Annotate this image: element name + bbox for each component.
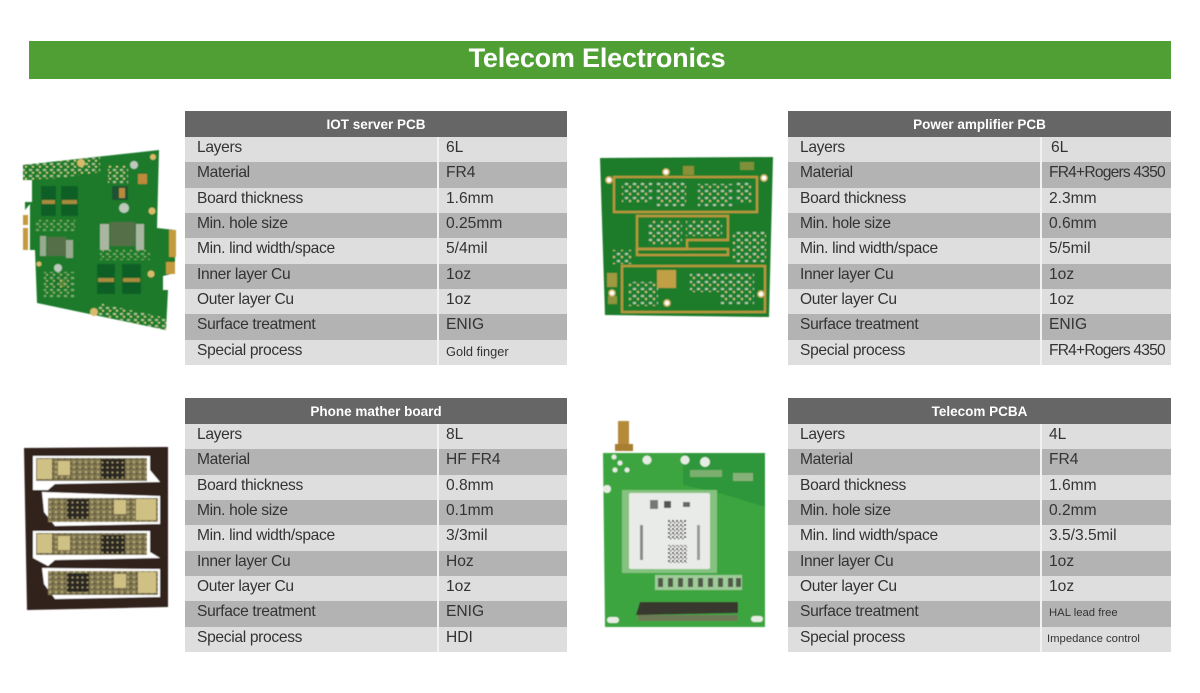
table: Power amplifier PCB: Min. hole size bbox=[800, 215, 891, 232]
table: Phone mather board: 0.1mm bbox=[446, 502, 494, 519]
table: Telecom PCBA: Layers bbox=[800, 426, 845, 443]
table: Power amplifier PCB: 5/5mil bbox=[1049, 240, 1091, 257]
table: Power amplifier PCB: Material bbox=[800, 164, 853, 181]
table: Telecom PCBA: Surface treatment bbox=[800, 603, 918, 620]
table: IOT server PCB: 1oz bbox=[446, 291, 471, 308]
table heading: IOT server PCB bbox=[326, 117, 426, 132]
table: Phone mather board: Board thickness bbox=[197, 477, 303, 494]
table: Phone mather board: Outer layer Cu bbox=[197, 578, 294, 595]
table: Telecom PCBA: Outer layer Cu bbox=[800, 578, 897, 595]
table: IOT server PCB: Gold finger bbox=[446, 344, 509, 359]
table: IOT server PCB: Surface treatment bbox=[197, 316, 315, 333]
table: Telecom PCBA: FR4 bbox=[1049, 451, 1078, 468]
table: IOT server PCB: Min. hole size bbox=[197, 215, 288, 232]
table: IOT server PCB: 1oz bbox=[446, 266, 471, 283]
table heading: Power amplifier PCB bbox=[913, 117, 1046, 132]
table: Telecom PCBA: Board thickness bbox=[800, 477, 906, 494]
table heading bbox=[788, 111, 1171, 137]
table: Telecom PCBA: 1oz bbox=[1049, 578, 1074, 595]
title banner bbox=[29, 41, 1171, 79]
table: Phone mather board: Surface treatment bbox=[197, 603, 315, 620]
table heading bbox=[788, 398, 1171, 424]
table: IOT server PCB: Min. lind width/space bbox=[197, 240, 335, 257]
table: Telecom PCBA: 4L bbox=[1049, 426, 1066, 443]
table: Phone mather board: HDI bbox=[446, 629, 473, 646]
table: Telecom PCBA: Impedance control bbox=[1047, 633, 1140, 645]
table heading bbox=[185, 111, 567, 137]
table: Telecom PCBA: Min. hole size bbox=[800, 502, 891, 519]
table: Phone mather board: Min. lind width/space bbox=[197, 527, 335, 544]
table: Power amplifier PCB: FR4+Rogers 4350 bbox=[1049, 342, 1165, 359]
table: Phone mather board: Inner layer Cu bbox=[197, 553, 290, 570]
table: IOT server PCB: Layers bbox=[197, 139, 242, 156]
table: IOT server PCB: 1.6mm bbox=[446, 190, 494, 207]
table: Phone mather board: 1oz bbox=[446, 578, 471, 595]
table: Power amplifier PCB: Special process bbox=[800, 342, 905, 359]
table: IOT server PCB: Inner layer Cu bbox=[197, 266, 290, 283]
table: Power amplifier PCB: 1oz bbox=[1049, 291, 1074, 308]
table: Phone mather board: 8L bbox=[446, 426, 463, 443]
table: IOT server PCB: Material bbox=[197, 164, 250, 181]
table: IOT server PCB: Special process bbox=[197, 342, 302, 359]
table heading: Phone mather board bbox=[310, 404, 442, 419]
table: Power amplifier PCB: Min. lind width/space bbox=[800, 240, 938, 257]
image: Phone mother board bbox=[23, 446, 169, 611]
table: Phone mather board: Special process bbox=[197, 629, 302, 646]
table: IOT server PCB: FR4 bbox=[446, 164, 475, 181]
image: Power amplifier PCB bbox=[599, 156, 774, 318]
table: Telecom PCBA bbox=[788, 398, 1171, 652]
table: Power amplifier PCB: FR4+Rogers 4350 bbox=[1049, 164, 1165, 181]
table: Power amplifier PCB: Outer layer Cu bbox=[800, 291, 897, 308]
table: Power amplifier PCB: 6L bbox=[1051, 139, 1068, 156]
table: IOT server PCB bbox=[185, 111, 567, 365]
table: Power amplifier PCB: Layers bbox=[800, 139, 845, 156]
table heading: Telecom PCBA bbox=[932, 404, 1027, 419]
table: Power amplifier PCB: 1oz bbox=[1049, 266, 1074, 283]
table: Phone mather board: ENIG bbox=[446, 603, 484, 620]
table: IOT server PCB: ENIG bbox=[446, 316, 484, 333]
table: Telecom PCBA: Special process bbox=[800, 629, 905, 646]
image: IOT server PCB bbox=[22, 149, 177, 331]
table: Power amplifier PCB: ENIG bbox=[1049, 316, 1087, 333]
table: IOT server PCB: 5/4mil bbox=[446, 240, 488, 257]
table: Phone mather board: 0.8mm bbox=[446, 477, 494, 494]
table heading bbox=[185, 398, 567, 424]
table: Power amplifier PCB: Board thickness bbox=[800, 190, 906, 207]
table: Telecom PCBA: 1oz bbox=[1049, 553, 1074, 570]
table: Telecom PCBA: HAL lead free bbox=[1049, 607, 1118, 619]
table: Phone mather board bbox=[185, 398, 567, 652]
table: Phone mather board: HF FR4 bbox=[446, 451, 501, 468]
table: Power amplifier PCB: Surface treatment bbox=[800, 316, 918, 333]
table: Telecom PCBA: 0.2mm bbox=[1049, 502, 1097, 519]
table: Phone mather board: 3/3mil bbox=[446, 527, 488, 544]
table: Power amplifier PCB: 2.3mm bbox=[1049, 190, 1097, 207]
table: Power amplifier PCB: 0.6mm bbox=[1049, 215, 1097, 232]
table: Telecom PCBA: Min. lind width/space bbox=[800, 527, 938, 544]
table: Phone mather board: Min. hole size bbox=[197, 502, 288, 519]
table: Telecom PCBA: 1.6mm bbox=[1049, 477, 1097, 494]
table: Power amplifier PCB bbox=[788, 111, 1171, 365]
table: Phone mather board: Material bbox=[197, 451, 250, 468]
table: Phone mather board: Hoz bbox=[446, 553, 474, 570]
table: IOT server PCB: Outer layer Cu bbox=[197, 291, 294, 308]
table: Phone mather board: Layers bbox=[197, 426, 242, 443]
table: Telecom PCBA: Inner layer Cu bbox=[800, 553, 893, 570]
title banner: Telecom Electronics bbox=[469, 43, 725, 73]
table: IOT server PCB: Board thickness bbox=[197, 190, 303, 207]
image: Telecom PCBA bbox=[602, 420, 766, 628]
table: Telecom PCBA: 3.5/3.5mil bbox=[1049, 527, 1117, 544]
table: Telecom PCBA: Material bbox=[800, 451, 853, 468]
table: IOT server PCB: 6L bbox=[446, 139, 463, 156]
table: Power amplifier PCB: Inner layer Cu bbox=[800, 266, 893, 283]
table: IOT server PCB: 0.25mm bbox=[446, 215, 502, 232]
